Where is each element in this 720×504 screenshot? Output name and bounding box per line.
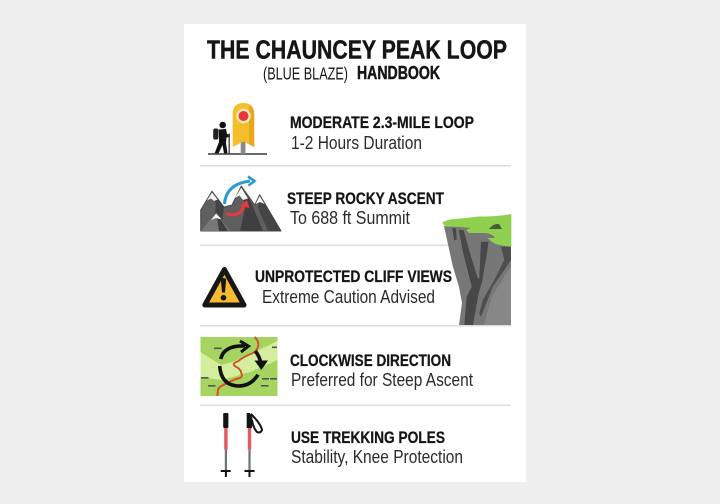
row 5 text: USE TREKKING POLES [291, 429, 445, 447]
panel: handbook card [184, 24, 526, 482]
subtitle [263, 63, 440, 84]
title: THE CHAUNCEY PEAK LOOP [207, 34, 507, 64]
illustration: cliff edge [442, 214, 511, 325]
row 2 text: To 688 ft Summit [290, 208, 410, 228]
row 2 text [287, 190, 444, 228]
row 1 text: 1-2 Hours Duration [291, 133, 422, 153]
row 3 text: UNPROTECTED CLIFF VIEWS [255, 268, 452, 286]
row 4 text: Preferred for Steep Ascent [291, 370, 473, 390]
icon: hiker and trail marker [208, 103, 267, 155]
icon: map with clockwise arrows [200, 337, 278, 396]
icon: warning triangle [205, 270, 244, 305]
row 3 text: Extreme Caution Advised [262, 287, 435, 307]
row 4 text [290, 352, 473, 390]
row 3 text [255, 268, 452, 307]
subtitle: (BLUE BLAZE) [263, 64, 348, 84]
icon: mountains with ascent arrows [201, 176, 281, 231]
row 5 text [291, 429, 463, 467]
row 1 text: MODERATE 2.3-MILE LOOP [290, 114, 474, 132]
row 4 text: CLOCKWISE DIRECTION [290, 352, 451, 370]
row 2 text: STEEP ROCKY ASCENT [287, 190, 444, 208]
row 5 text: Stability, Knee Protection [291, 447, 463, 467]
icon: trekking poles [221, 413, 262, 477]
row 1 text [290, 114, 474, 153]
subtitle: HANDBOOK [357, 63, 440, 83]
